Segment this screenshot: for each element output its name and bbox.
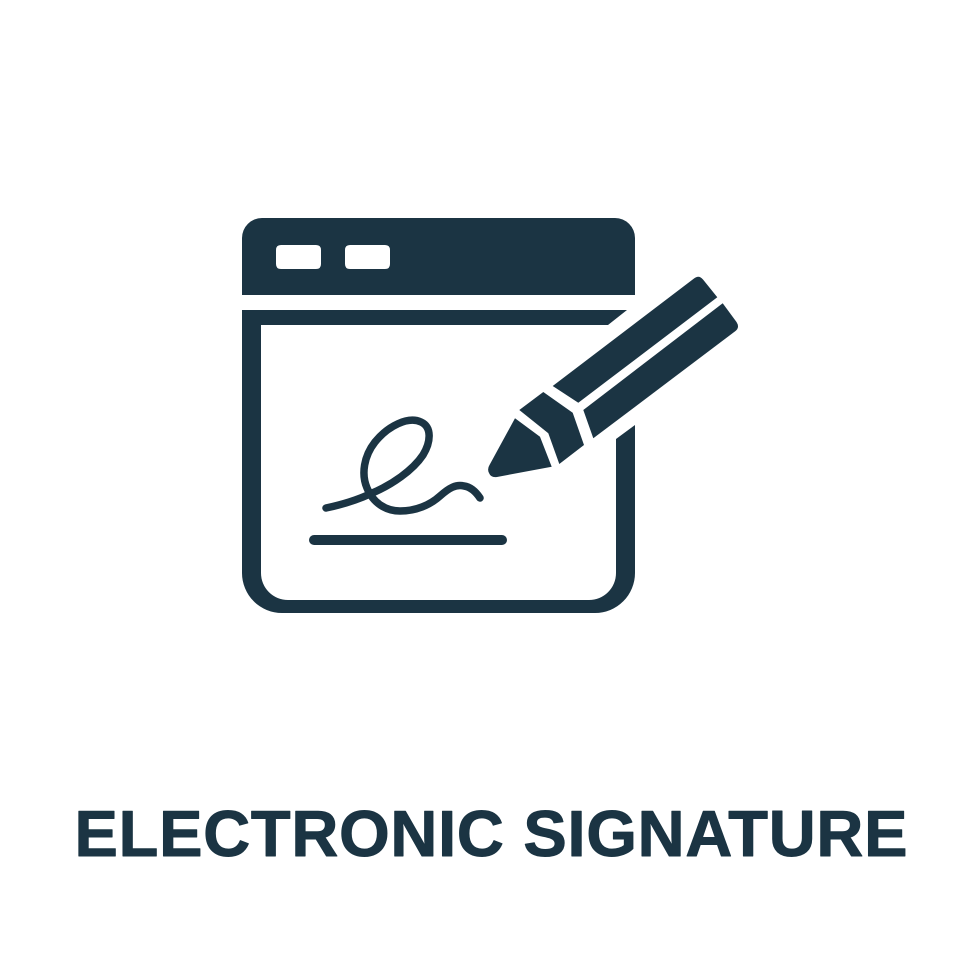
icon: browser title bar bbox=[242, 218, 635, 295]
icon: signature line bbox=[309, 535, 507, 545]
title: ELECTRONIC SIGNATURE bbox=[74, 797, 908, 870]
pencil ferrule bbox=[519, 392, 584, 464]
pencil upper body bbox=[553, 277, 717, 403]
icon: electronic signature bbox=[242, 218, 738, 613]
pencil lower body bbox=[583, 303, 738, 438]
icon: signature scribble bbox=[326, 420, 480, 511]
icon: browser window frame bbox=[242, 310, 635, 613]
pencil tip bbox=[488, 418, 552, 477]
icon: pencil bbox=[488, 277, 738, 477]
